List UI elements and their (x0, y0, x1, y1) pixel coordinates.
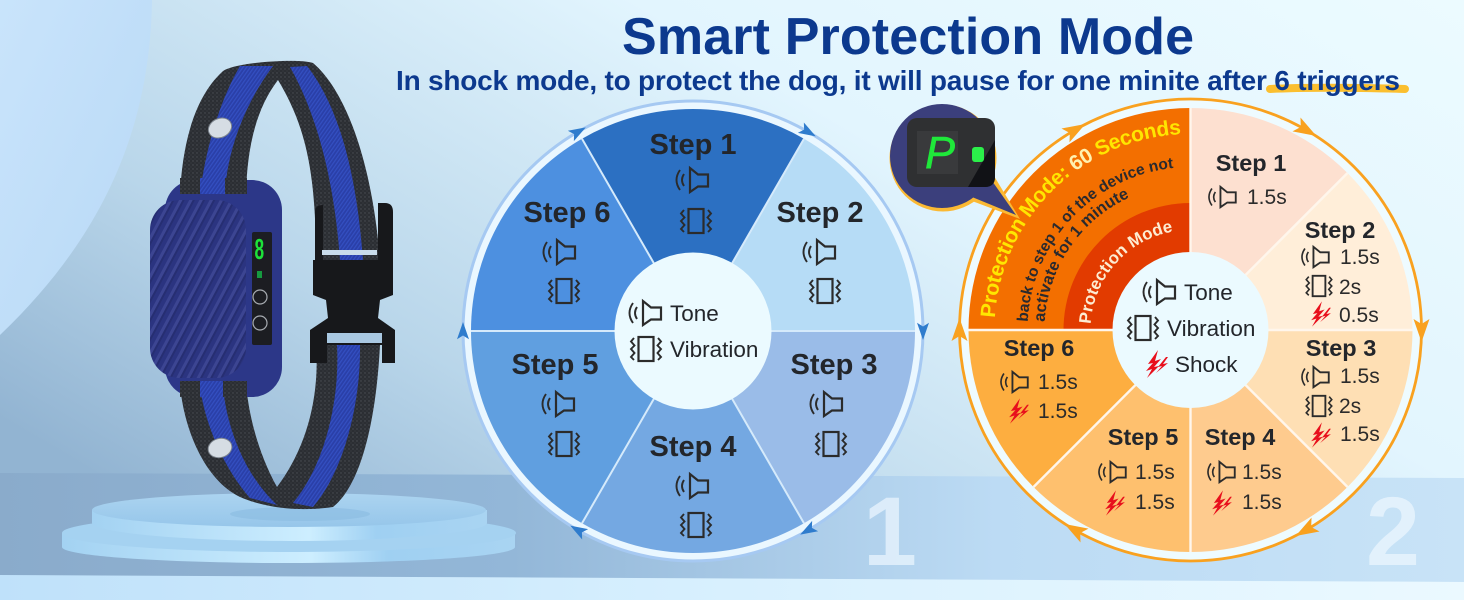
collar display: 8 (254, 235, 264, 266)
step 3 sector: Step 3 (1306, 335, 1376, 361)
step 6 sector (471, 139, 693, 331)
step 5 sector (1034, 330, 1190, 552)
step 2 sector: Step 2 (1305, 217, 1375, 243)
step 2 sector (693, 139, 915, 331)
step 3 sector (693, 331, 915, 523)
background sphere (0, 0, 152, 335)
callout: device display showing P (890, 104, 1020, 219)
buckle (310, 203, 395, 363)
step 4 sector: Step 4 (1205, 424, 1275, 450)
wheel 1 legend (614, 252, 772, 410)
dog collar product (150, 61, 395, 509)
step 3 sector: 2s (1339, 395, 1361, 418)
strap stripes (200, 66, 363, 507)
step 1 sector: Step 1 (649, 129, 737, 161)
wheel 2 legend: Vibration (1167, 316, 1255, 341)
protection mode sector: activate for 1 minute (1036, 190, 1128, 322)
step 4 sector: Step 4 (649, 431, 737, 463)
step 3 sector: 1.5s (1340, 365, 1380, 388)
title: Smart Protection Mode (622, 8, 1194, 66)
step 6 sector: 1.5s (1038, 371, 1078, 394)
step 6 sector (968, 330, 1190, 487)
wheel 1 legend: Tone (670, 301, 719, 326)
step 2 sector: 1.5s (1340, 246, 1380, 269)
big number 2: 2 (1366, 477, 1420, 586)
step 5 sector: 1.5s (1135, 461, 1175, 484)
underline highlight (1270, 88, 1405, 89)
step 6 sector: Step 6 (523, 197, 611, 229)
podium (62, 493, 516, 563)
panel: wheel 2 tone, vibration and shock (952, 98, 1430, 562)
step 1 sector (1190, 108, 1348, 330)
step 5 sector: Step 5 (1108, 424, 1178, 450)
collar body (165, 180, 282, 397)
front ledge (0, 575, 1464, 600)
step 5 sector: 1.5s (1135, 491, 1175, 514)
ribbed pad (150, 200, 246, 378)
step 2 sector (1190, 173, 1412, 330)
step 4 sector (1190, 330, 1348, 552)
wheel 2 legend: Tone (1184, 280, 1233, 305)
subtitle: In shock mode, to protect the dog, it will pause for one minite after 6 triggers (396, 65, 1400, 96)
step 3 sector (1190, 330, 1412, 487)
step 2 sector: Step 2 (776, 197, 864, 229)
step 1 sector: 1.5s (1247, 186, 1287, 209)
step 4 sector (582, 331, 804, 553)
step 3 sector: Step 3 (790, 349, 878, 381)
collar display (252, 232, 272, 345)
step 6 sector: Step 6 (1004, 335, 1074, 361)
protection mode sector: back to step 1 of the device not (1016, 158, 1174, 321)
wheel 2 ring (952, 99, 1430, 561)
step 4 sector: 1.5s (1242, 491, 1282, 514)
step 3 sector: 1.5s (1340, 423, 1380, 446)
step 1 sector (582, 109, 804, 331)
protection mode sector: Protection Mode (1079, 222, 1172, 323)
step 5 sector (471, 331, 693, 523)
step 1 sector: Step 1 (1216, 150, 1286, 176)
lower strap (180, 345, 380, 509)
strap pocket ends (180, 178, 247, 397)
step 6 sector: 1.5s (1038, 400, 1078, 423)
step 5 sector: Step 5 (511, 349, 599, 381)
upper strap (180, 61, 380, 260)
big number 1: 1 (863, 477, 917, 586)
wheel 1 ring (457, 101, 929, 561)
wheel 1 legend: Vibration (670, 337, 758, 362)
step 4 sector: 1.5s (1242, 461, 1282, 484)
rivets (205, 114, 235, 460)
callout: device display showing P: P (925, 127, 955, 178)
wheel 2 legend: Shock (1175, 352, 1238, 377)
panel: wheel 1 tone and vibration (457, 101, 929, 561)
wheel 2 legend (1112, 252, 1268, 408)
step 2 sector: 2s (1339, 276, 1361, 299)
step 2 sector: 0.5s (1339, 304, 1379, 327)
floor (0, 473, 1464, 582)
protection mode sector: Protection Mode: 60 Seconds (980, 120, 1180, 317)
